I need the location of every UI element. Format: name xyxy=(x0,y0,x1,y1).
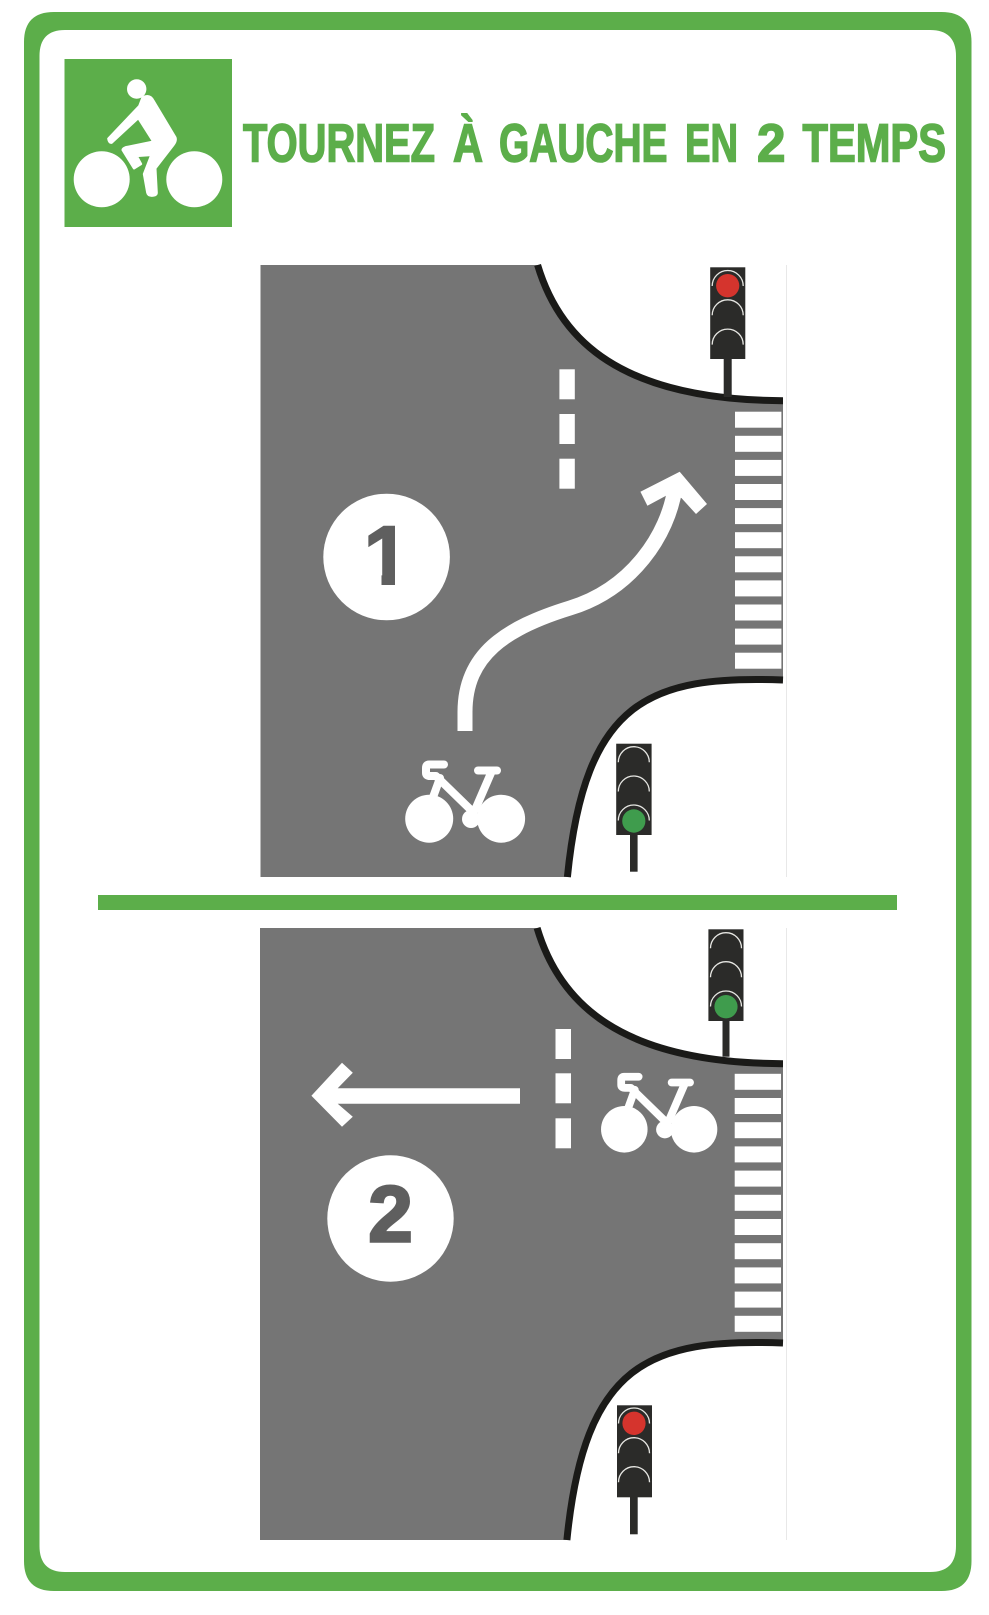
icon: cyclist sign xyxy=(64,59,232,227)
traffic light: green, bottom xyxy=(616,744,652,872)
title: À xyxy=(453,114,483,174)
pedestrian crossing xyxy=(735,412,781,669)
title: 2 xyxy=(757,114,786,174)
curbs xyxy=(537,928,783,1540)
number badge 1: 1 xyxy=(364,509,410,603)
number badge 2 xyxy=(327,1155,454,1282)
title: TOURNEZ xyxy=(243,114,435,174)
number badge 2: 2 xyxy=(368,1170,413,1259)
title: TEMPS xyxy=(802,114,946,174)
traffic light: green, top xyxy=(708,929,744,1057)
curbs xyxy=(538,265,783,877)
traffic light: red, bottom xyxy=(617,1405,652,1534)
icon: bicycle xyxy=(405,764,525,843)
icon: bicycle xyxy=(601,1077,717,1153)
dashed line xyxy=(559,369,575,489)
pedestrian crossing xyxy=(735,1074,781,1332)
divider bar xyxy=(98,895,897,910)
arrow: straight left xyxy=(311,1063,520,1127)
dashed line xyxy=(556,1029,571,1148)
title xyxy=(243,114,946,174)
arrow: curved left-turn path xyxy=(465,472,707,731)
title: GAUCHE xyxy=(499,114,668,174)
title: EN xyxy=(685,114,738,174)
number badge 1 xyxy=(323,494,450,620)
road surface xyxy=(260,928,783,1540)
road surface xyxy=(260,265,783,877)
panel: step 1 intersection xyxy=(260,265,786,877)
panel: step 2 intersection xyxy=(260,928,786,1540)
traffic light: red, top xyxy=(710,267,745,397)
